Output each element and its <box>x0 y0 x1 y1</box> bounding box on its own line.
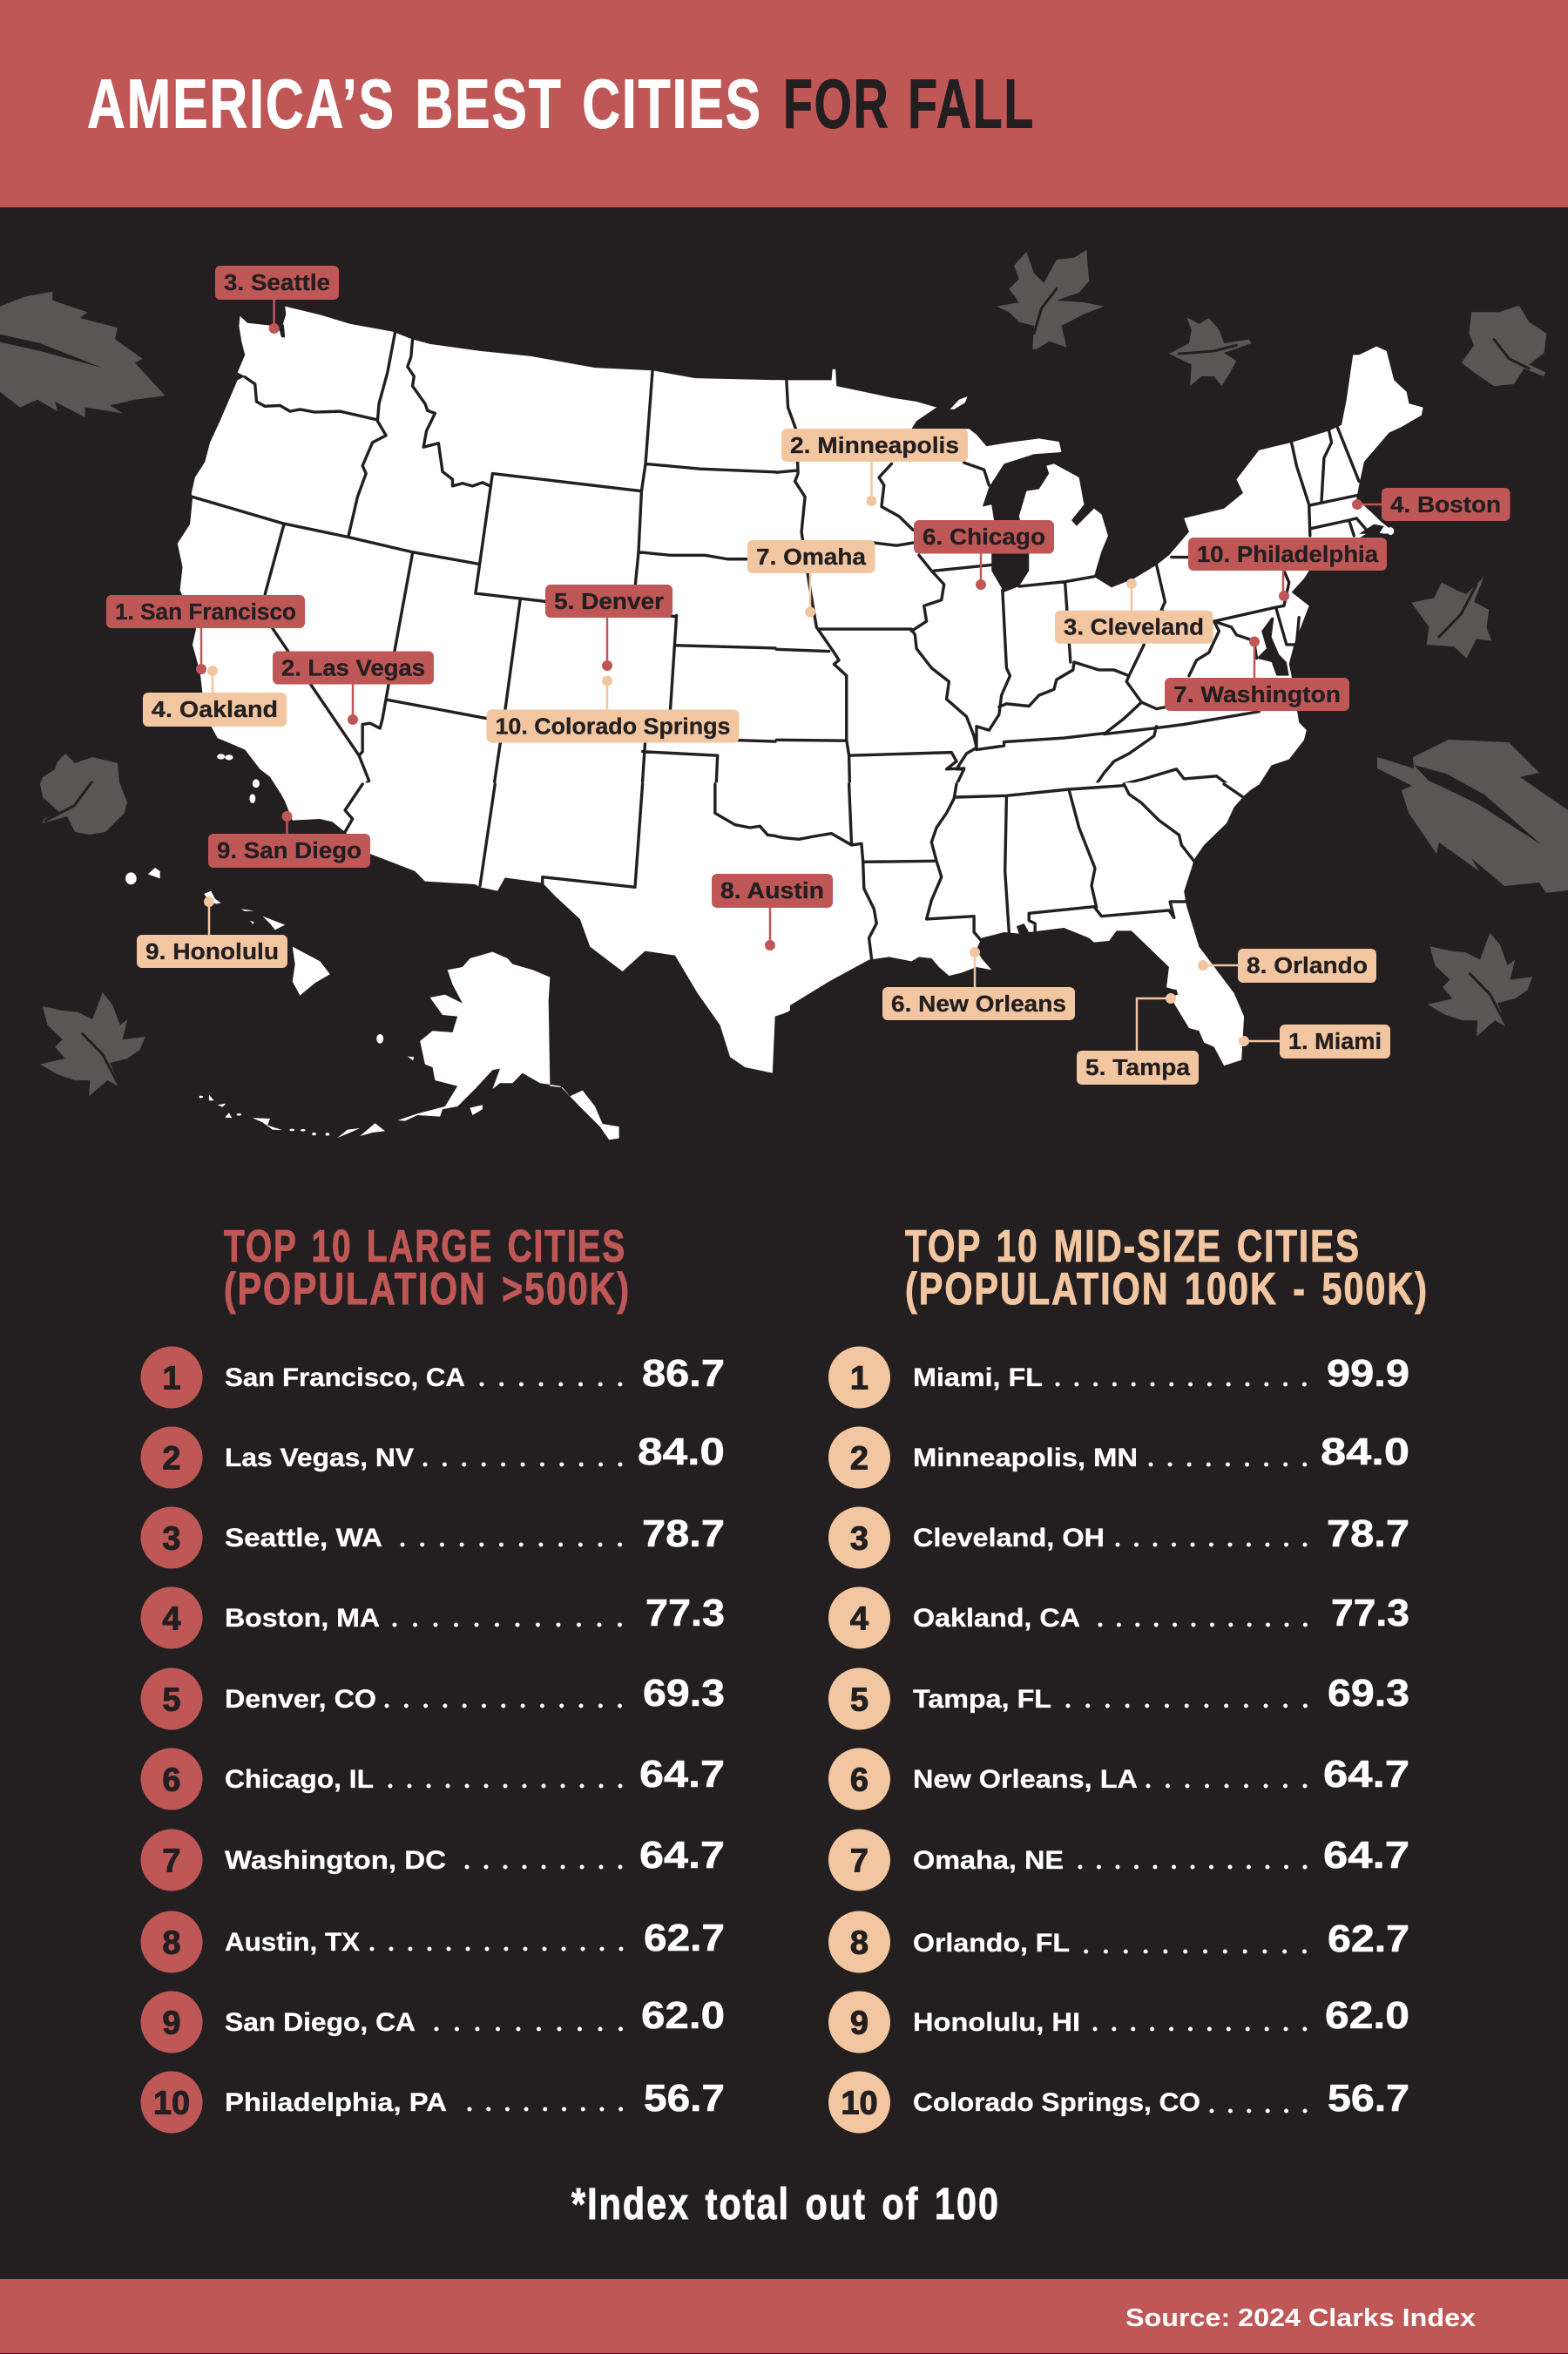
row: Philadelphia <box>141 2072 725 2133</box>
label: 1. Miami: 1. Miami <box>1288 1030 1382 1054</box>
row: Miami <box>828 1347 1409 1408</box>
row: Denver: 5 <box>162 1681 181 1718</box>
row: Oakland: 4 <box>850 1601 868 1638</box>
row: Las Vegas: Las Vegas, NV <box>225 1444 414 1472</box>
label: 5. Tampa: 5. Tampa <box>1085 1056 1191 1080</box>
row: Austin: 62.7 <box>644 1917 725 1959</box>
label: 10. Philadelphia <box>1188 538 1387 601</box>
map: Alaska <box>199 952 619 1140</box>
label: 1. San Francisco <box>106 595 305 674</box>
row: San Francisco: 86.7 <box>642 1352 725 1395</box>
label: 4. Oakland: 4. Oakland <box>152 698 278 722</box>
label: 3. Cleveland: 3. Cleveland <box>1064 616 1204 640</box>
row: Cleveland: 3 <box>850 1521 868 1558</box>
label: 4. Boston: 4. Boston <box>1390 493 1501 517</box>
map: northwest quadrant <box>178 307 790 819</box>
row: Philadelphia: 56.7 <box>644 2077 725 2120</box>
label: 7. Omaha <box>747 540 875 617</box>
row: Las Vegas: 84.0 <box>638 1431 725 1473</box>
row: Philadelphia: Philadelphia, PA <box>225 2088 447 2117</box>
row: San Diego: 62.0 <box>641 1994 725 2037</box>
row: Washington <box>141 1830 725 1891</box>
row: Boston: 77.3 <box>645 1592 725 1634</box>
row: Honolulu: Honolulu, HI <box>913 2008 1080 2037</box>
label: 10. Colorado Springs: 10. Colorado Springs <box>495 714 730 739</box>
row: San Diego <box>141 1992 725 2053</box>
row: Colorado Springs: 10 <box>841 2086 878 2122</box>
row: Tampa: Tampa, FL <box>913 1685 1051 1714</box>
row: Honolulu: 62.0 <box>1325 1994 1409 2037</box>
label: 8. Orlando: 8. Orlando <box>1247 954 1368 978</box>
row: Philadelphia: 10 <box>153 2086 190 2122</box>
heading: large cities: TOP 10 LARGE CITIES <box>224 1221 626 1272</box>
footnote: *Index total out of 100 <box>571 2179 1000 2229</box>
map: southwest quadrant <box>125 782 790 1140</box>
decorative leaves <box>0 250 1568 1096</box>
label: 5. Denver: 5. Denver <box>554 590 664 614</box>
row: Omaha: 64.7 <box>1323 1834 1409 1877</box>
row: Minneapolis: Minneapolis, MN <box>913 1444 1138 1472</box>
label: 3. Seattle: 3. Seattle <box>224 271 330 295</box>
source: Source: 2024 Clarks Index <box>1125 2304 1476 2332</box>
row: Seattle: Seattle, WA <box>225 1524 382 1552</box>
row: Omaha <box>828 1830 1409 1891</box>
row: Washington: 7 <box>162 1843 181 1880</box>
map of the United States <box>125 307 1423 1140</box>
heading: large cities: (POPULATION >500K) <box>224 1264 631 1315</box>
map: Hawaii <box>125 868 330 996</box>
row: Austin: Austin, TX <box>225 1928 360 1957</box>
label: 4. Boston <box>1352 488 1511 521</box>
row: Colorado Springs: 56.7 <box>1328 2077 1409 2120</box>
label: 2. Minneapolis <box>781 429 968 506</box>
row: Austin <box>141 1911 725 1972</box>
row: Las Vegas <box>141 1427 725 1488</box>
panel: top 10 mid-size cities <box>828 1221 1429 2133</box>
row: Miami: 1 <box>850 1361 868 1397</box>
row: Chicago: 64.7 <box>639 1753 725 1796</box>
map: northeast quadrant <box>776 347 1423 819</box>
row: Orlando: Orlando, FL <box>913 1929 1070 1958</box>
row: New Orleans: 6 <box>850 1762 868 1798</box>
label: 8. Austin: 8. Austin <box>720 879 824 903</box>
title: FOR FALL <box>783 64 1035 143</box>
title: AMERICA’S BEST CITIES <box>87 64 762 143</box>
row: Orlando <box>828 1911 1409 1972</box>
row: Colorado Springs <box>828 2072 1409 2133</box>
row: Minneapolis <box>828 1427 1409 1488</box>
row: Washington: Washington, DC <box>225 1846 446 1875</box>
label: 9. Honolulu: 9. Honolulu <box>145 940 279 964</box>
label: 6. Chicago <box>914 520 1054 590</box>
row: New Orleans <box>828 1748 1409 1810</box>
row: Oakland: 77.3 <box>1331 1592 1409 1634</box>
label: 10. Philadelphia: 10. Philadelphia <box>1197 543 1379 567</box>
heading: mid-size cities <box>905 1221 1429 1315</box>
row: San Francisco: 1 <box>162 1361 181 1397</box>
row: Chicago: 6 <box>162 1762 181 1798</box>
row: Orlando: 8 <box>850 1925 868 1962</box>
row: San Francisco <box>141 1347 725 1408</box>
row: Oakland <box>828 1587 1409 1648</box>
label: 7. Washington: 7. Washington <box>1173 683 1341 707</box>
row: Colorado Springs: Colorado Springs, CO <box>913 2088 1200 2117</box>
row: Tampa: 5 <box>850 1681 868 1718</box>
label: 6. Chicago: 6. Chicago <box>923 525 1045 550</box>
row: Denver: 69.3 <box>643 1672 725 1715</box>
label: 6. New Orleans: 6. New Orleans <box>891 992 1066 1017</box>
label: 7. Washington <box>1165 636 1349 711</box>
map labels: large cities <box>106 266 1511 950</box>
label: 9. San Diego: 9. San Diego <box>217 839 362 863</box>
label: 9. Honolulu <box>137 896 287 968</box>
row: New Orleans: New Orleans, LA <box>913 1765 1138 1794</box>
map: southeast quadrant <box>776 782 1259 1065</box>
label: 8. Austin <box>712 874 833 950</box>
label: 10. Colorado Springs <box>486 676 739 742</box>
row: San Francisco: San Francisco, CA <box>225 1363 465 1392</box>
row: Honolulu <box>828 1992 1409 2053</box>
row: Minneapolis: 2 <box>850 1441 868 1478</box>
heading: mid-size cities: (POPULATION 100K - 500K) <box>905 1264 1429 1315</box>
panel: top 10 large cities <box>141 1221 725 2133</box>
label: 6. New Orleans <box>882 947 1075 1020</box>
row: Minneapolis: 84.0 <box>1321 1431 1409 1473</box>
row: Omaha: Omaha, NE <box>913 1846 1064 1875</box>
row: Oakland: Oakland, CA <box>913 1604 1080 1633</box>
map labels: mid-size cities <box>137 429 1390 1085</box>
row: Boston: 4 <box>162 1601 181 1638</box>
label: 2. Las Vegas <box>273 652 434 725</box>
row: Boston <box>141 1587 725 1648</box>
label: 3. Seattle <box>215 266 339 334</box>
row: Omaha: 7 <box>850 1843 868 1880</box>
label: 5. Tampa <box>1077 993 1199 1085</box>
row: Miami: 99.9 <box>1327 1352 1409 1395</box>
row: Denver <box>141 1667 725 1730</box>
row: San Diego: 9 <box>162 2006 181 2042</box>
row: Cleveland: 78.7 <box>1327 1512 1409 1555</box>
row: Seattle <box>141 1507 725 1568</box>
label: 3. Cleveland <box>1055 578 1213 644</box>
heading: large cities <box>224 1221 631 1315</box>
header band <box>0 0 1568 207</box>
row: Washington: 64.7 <box>639 1834 725 1877</box>
row: Cleveland: Cleveland, OH <box>913 1524 1105 1552</box>
heading: mid-size cities: TOP 10 MID-SIZE CITIES <box>905 1221 1361 1272</box>
row: New Orleans: 64.7 <box>1323 1753 1409 1796</box>
row: San Diego: San Diego, CA <box>225 2008 416 2037</box>
label: 2. Las Vegas: 2. Las Vegas <box>281 657 425 681</box>
row: Seattle: 3 <box>162 1521 181 1558</box>
row: Honolulu: 9 <box>850 2006 868 2042</box>
row: Orlando: 62.7 <box>1328 1918 1409 1960</box>
label: 5. Denver <box>545 585 672 671</box>
row: Seattle: 78.7 <box>642 1512 725 1555</box>
row: Denver: Denver, CO <box>225 1685 376 1714</box>
label: 4. Oakland <box>143 666 287 727</box>
label: 1. Miami <box>1239 1025 1390 1059</box>
label: 9. San Diego <box>208 811 370 868</box>
row: Cleveland <box>828 1507 1409 1568</box>
row: Tampa <box>828 1667 1409 1730</box>
label: 1. San Francisco: 1. San Francisco <box>115 600 296 625</box>
row: Tampa: 69.3 <box>1328 1672 1409 1715</box>
row: Chicago <box>141 1748 725 1810</box>
row: Las Vegas: 2 <box>162 1441 181 1478</box>
row: Chicago: Chicago, IL <box>225 1765 374 1794</box>
row: Miami: Miami, FL <box>913 1363 1043 1392</box>
row: Austin: 8 <box>162 1925 181 1962</box>
label: 2. Minneapolis: 2. Minneapolis <box>790 434 959 458</box>
row: Boston: Boston, MA <box>225 1604 380 1633</box>
footer band <box>0 2279 1568 2353</box>
label: 7. Omaha: 7. Omaha <box>756 545 867 570</box>
label: 8. Orlando <box>1198 949 1376 983</box>
